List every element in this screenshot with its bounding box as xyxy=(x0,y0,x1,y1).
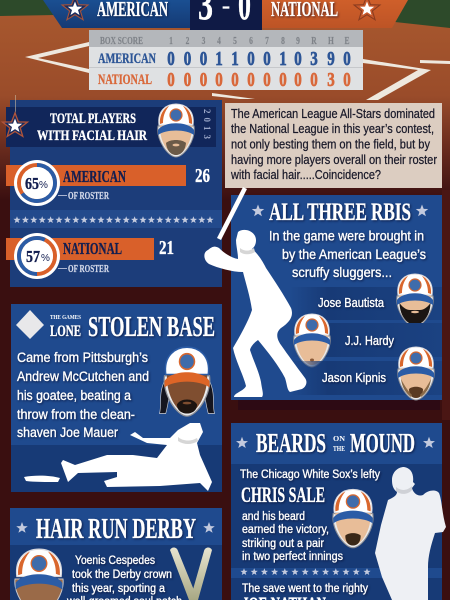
text block: Chris Sale: CHRIS SALE xyxy=(241,482,325,507)
text block: his goatee, beating a xyxy=(17,388,131,403)
donut: 65 percent: % xyxy=(39,180,48,191)
text block: intro: not only besting them on the field, but by xyxy=(231,138,431,152)
row: Jose Bautista xyxy=(290,274,442,327)
heading: STOLEN BASE xyxy=(88,312,215,343)
text block: throw from the clean- xyxy=(17,407,135,422)
box score header: BOX SCORE xyxy=(100,35,143,47)
American bar row: AMERICAN xyxy=(63,167,126,186)
box score header xyxy=(100,35,350,47)
pitcher silhouette xyxy=(375,467,446,600)
American bar row: OF ROSTER xyxy=(68,191,109,202)
text block: Yoenis Cespedes xyxy=(75,555,155,567)
donut: 57 percent: 57 xyxy=(26,247,40,266)
text block: the save xyxy=(242,583,368,600)
National row: 000000000030 xyxy=(167,68,351,91)
panel: lone stolen base xyxy=(11,304,222,492)
icon: star ornament xyxy=(3,95,27,136)
heading: LONE xyxy=(50,323,81,340)
icon: Cespedes face xyxy=(15,549,63,600)
text block: Chris Sale xyxy=(240,469,380,563)
text block xyxy=(17,350,149,440)
box score header: 123456789RHE xyxy=(169,35,350,46)
final score xyxy=(190,0,262,30)
slider silhouette xyxy=(24,423,212,491)
star divider xyxy=(240,568,371,575)
heading: HAIR RUN DERBY xyxy=(36,513,196,545)
donut: 57 percent: % xyxy=(41,253,50,264)
text block: the save: The save went to the righty xyxy=(242,583,368,595)
row: Jose Bautista: Jose Bautista xyxy=(318,296,384,310)
National row: NATIONAL xyxy=(98,72,152,88)
National bar row xyxy=(6,233,174,279)
row: J.J. Hardy xyxy=(290,314,442,367)
text block: Came from Pittsburgh’s xyxy=(17,350,148,365)
text block: intro xyxy=(225,103,442,188)
American row: 000110010390 xyxy=(167,47,351,70)
text block: scruffy sluggers... xyxy=(292,265,392,280)
heading: THE xyxy=(333,444,345,453)
text block: this year, sporting a xyxy=(72,583,166,595)
text block: Chris Sale: The Chicago White Sox’s lefty xyxy=(240,469,380,481)
National bar row: 21 xyxy=(159,237,174,259)
American bar row: 26 xyxy=(195,165,210,187)
heading xyxy=(16,513,215,545)
row: J.J. Hardy: J.J. Hardy xyxy=(345,334,395,348)
text block: Andrew McCutchen and xyxy=(17,369,149,384)
text block: shaven Joe Mauer xyxy=(17,425,118,440)
text block: Chris Sale: in two perfect innings xyxy=(242,551,343,563)
icon: Chris Sale face xyxy=(333,489,373,548)
panel: beards on the mound xyxy=(231,423,446,600)
American row: AMERICAN xyxy=(98,51,156,67)
panel header: WITH FACIAL HAIR xyxy=(37,128,147,144)
star divider xyxy=(10,210,222,228)
heading: THE GAMES xyxy=(50,314,81,321)
National team banner xyxy=(262,0,408,28)
National bar row: OF ROSTER xyxy=(68,264,109,275)
text block: Chris Sale: earned the victory, xyxy=(242,524,329,536)
text block: Chris Sale: striking out a pair xyxy=(242,538,324,550)
panel: all three RBIs xyxy=(204,187,442,400)
heading: ON xyxy=(333,434,346,443)
American bar row xyxy=(6,160,210,206)
heading: BEARDS xyxy=(256,428,326,458)
panel: hair run derby xyxy=(10,508,222,600)
panel header: TOTAL PLAYERS xyxy=(50,111,136,127)
text block: took the Derby crown xyxy=(72,569,172,581)
text block xyxy=(269,228,426,280)
icon: crossed bats xyxy=(170,547,212,600)
box score table xyxy=(89,30,363,91)
text block: intro: with facial hair.....Coincidence? xyxy=(230,168,381,182)
row: Jason Kipnis xyxy=(290,347,442,400)
donut: 57 percent xyxy=(14,233,60,279)
heading xyxy=(50,312,215,343)
row: Jason Kipnis: Jason Kipnis xyxy=(322,371,386,385)
text block: by the American League’s xyxy=(282,247,426,262)
icon: base diamond xyxy=(16,310,44,339)
scoreboard banner xyxy=(43,0,408,30)
panel: total players with facial hair xyxy=(3,95,222,287)
American team banner xyxy=(43,0,190,28)
donut: 65 percent xyxy=(14,160,60,206)
text block xyxy=(66,555,182,600)
text block: Chris Sale: and his beard xyxy=(242,511,305,523)
donut: 65 percent: 65 xyxy=(25,174,39,193)
icon: bearded player face xyxy=(158,104,194,157)
National bar row: NATIONAL xyxy=(63,239,122,258)
heading xyxy=(236,428,435,458)
panel header: 2013 xyxy=(202,109,212,140)
icon: McCutchen face xyxy=(160,347,214,416)
batter silhouette xyxy=(204,187,306,397)
text block: In the game were brought in xyxy=(269,228,424,244)
panel header xyxy=(6,107,216,147)
